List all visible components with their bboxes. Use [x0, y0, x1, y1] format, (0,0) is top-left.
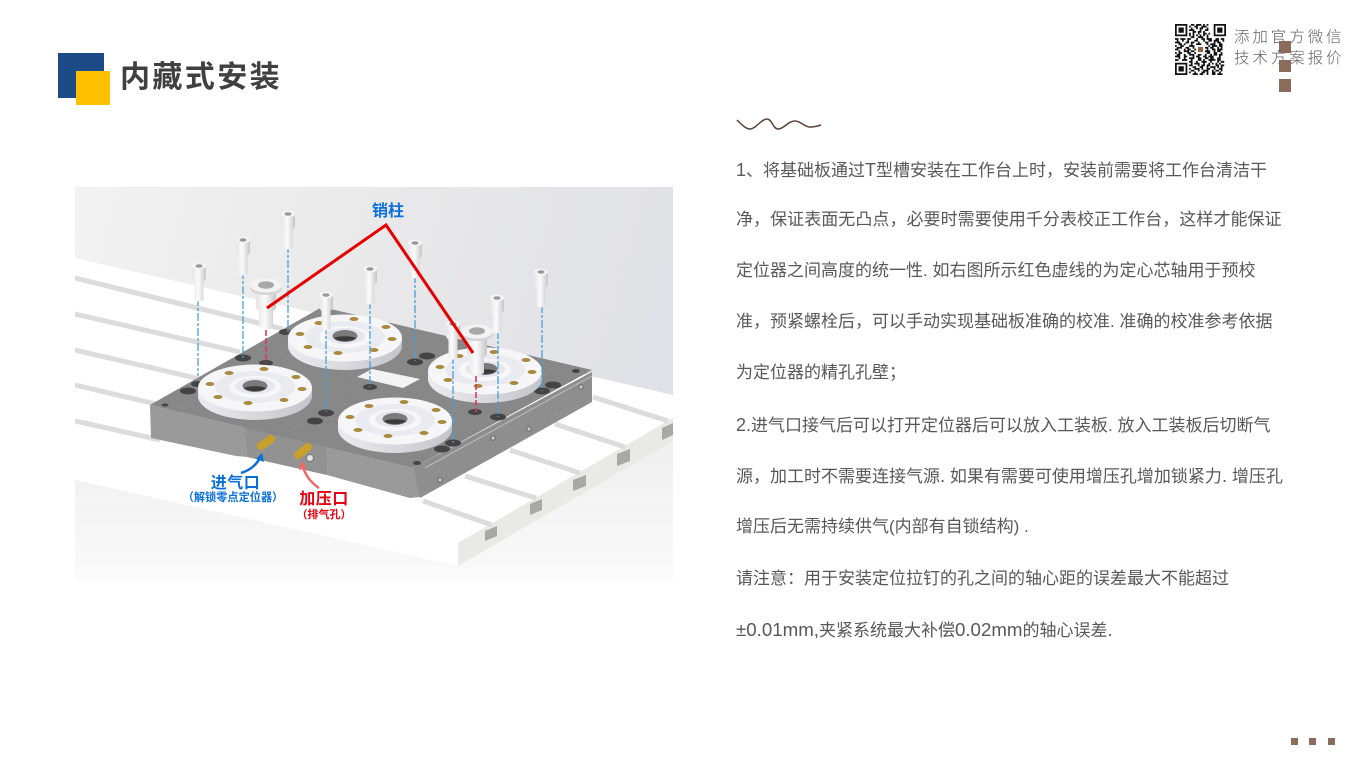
- body text: 源，加工时不需要连接气源. 如果有需要可使用增压孔增加锁紧力. 增压孔: [736, 465, 1283, 486]
- body text: 定位器之间高度的统一性. 如右图所示红色虚线的为定心芯轴用于预校: [736, 261, 1255, 280]
- body text: [736, 160, 1283, 640]
- plate notch recess: [243, 425, 328, 475]
- label: pressure port: 加压口: [299, 490, 349, 508]
- bolt 9: [534, 269, 548, 308]
- label: air inlet: 进气口: [211, 474, 260, 492]
- decorative wavy line: [736, 118, 822, 130]
- label: pressure port: （排气孔）: [296, 507, 352, 521]
- locator discs: [198, 314, 542, 453]
- blue and red dashed axis lines: [198, 245, 542, 443]
- bolt 4: [319, 292, 333, 330]
- locating pin left: [250, 278, 282, 330]
- body text: 增压后无需持续供气(内部有自锁结构) .: [736, 517, 1029, 536]
- bolt 1: [192, 263, 206, 302]
- disc: front: [338, 398, 452, 453]
- label plate: [357, 369, 420, 388]
- label: air inlet: （解锁零点定位器）: [183, 490, 283, 504]
- exhaust hole: [306, 454, 314, 462]
- mounting holes: [162, 329, 580, 465]
- WeChat contact text: [1234, 28, 1344, 67]
- bolt 3: [281, 211, 295, 250]
- installation illustration: [75, 187, 673, 566]
- slot notches on front face: [485, 423, 673, 541]
- arrow: pressure port: [299, 461, 319, 488]
- decorative brown vertical squares: [1279, 41, 1291, 92]
- body text: 1、将基础板通过T型槽安装在工作台上时，安装前需要将工作台清洁干: [736, 160, 1267, 180]
- plate right face: [413, 372, 592, 498]
- label: pin: 销柱: [372, 202, 404, 220]
- bolts: [192, 211, 548, 376]
- base plate: [150, 307, 592, 498]
- floor and reflection: [75, 430, 673, 581]
- wall background: [75, 187, 673, 581]
- text: installation notes: [736, 160, 1283, 640]
- brass air fittings: [261, 439, 314, 462]
- plate top face: [150, 307, 592, 468]
- arrow: air inlet: [241, 453, 264, 473]
- red leader line to pins: [267, 225, 473, 353]
- body text: 准，预紧螺栓后，可以手动实现基础板准确的校准. 准确的校准参考依据: [736, 312, 1272, 331]
- body text: ±0.01mm,夹紧系统最大补偿0.02mm的轴心误差.: [736, 619, 1113, 640]
- title: 内藏式安装: [120, 61, 282, 94]
- table top surface: [75, 258, 673, 566]
- body text: 2.进气口接气后可以打开定位器后可以放入工装板. 放入工装板后切断气: [736, 415, 1270, 435]
- locating pin right: [461, 324, 493, 376]
- bolt 6: [408, 240, 422, 278]
- disc: right: [428, 348, 542, 403]
- bolt 8: [490, 295, 504, 334]
- fitting: pressure port: [298, 447, 308, 455]
- bolt 5: [363, 266, 377, 304]
- label: air inlet: [183, 474, 283, 504]
- QR code: [1175, 24, 1226, 75]
- bolt 7: [446, 321, 460, 360]
- body text: 为定位器的精孔孔壁；: [736, 363, 906, 382]
- WeChat contact text: 添加官方微信: [1234, 29, 1344, 46]
- T-slot table: [75, 258, 673, 566]
- WeChat contact text: 技术方案报价: [1234, 50, 1344, 67]
- body text: 净，保证表面无凸点，必要时需要使用千分表校正工作台，这样才能保证: [736, 210, 1282, 229]
- disc: back: [288, 314, 402, 370]
- side screws: [438, 385, 583, 482]
- label: pressure port: [296, 490, 352, 521]
- body text: 请注意：用于安装定位拉钉的孔之间的轴心距的误差最大不能超过: [736, 569, 1229, 588]
- slot strips on table top: [75, 278, 668, 525]
- footer decorative squares: [1291, 738, 1335, 745]
- disc: left: [198, 364, 312, 420]
- plate front face: [150, 405, 420, 498]
- header icon: overlapping blue and yellow squares: [58, 53, 110, 105]
- fitting: air inlet: [261, 439, 271, 446]
- bolt 2: [236, 237, 250, 276]
- table front stepped faces: [458, 418, 673, 566]
